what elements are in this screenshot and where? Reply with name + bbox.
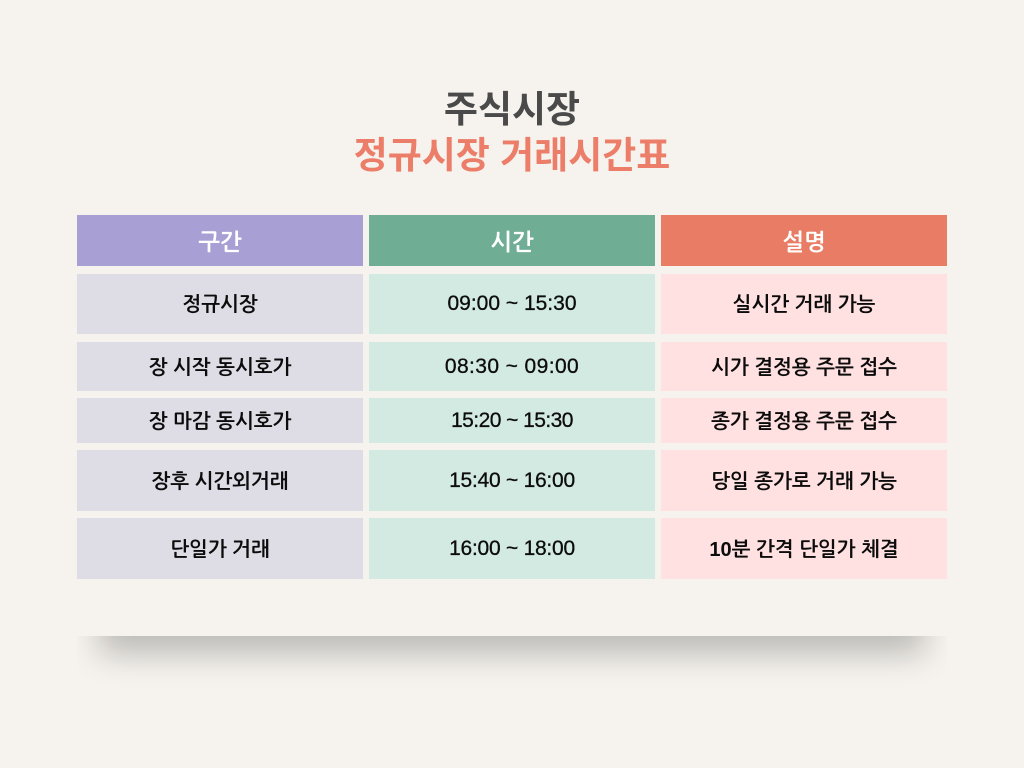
row 2 time: 08:30 ~ 09:00 [445,354,579,378]
row 1 time [369,274,655,334]
row 2 description [661,342,947,391]
row 2 time [369,342,655,391]
row 4 time [369,450,655,511]
row 3 description: 종가 결정용 주문 접수 [711,411,897,433]
header: 구간: 구간 [198,229,242,255]
row 5 description: 10분 간격 단일가 체결 [709,539,899,561]
row 4 description [661,450,947,511]
title: 주식시장: 주식시장 [444,89,580,130]
row 4 time: 15:40 ~ 16:00 [449,468,575,492]
title: 정규시장 거래시간표: 정규시장 거래시간표 [354,135,670,176]
header: 설명 [661,215,947,266]
row 3 description [661,398,947,443]
row 1 section: 정규시장 [182,294,258,316]
row 5 time: 16:00 ~ 18:00 [449,536,575,560]
row 3 section [77,398,363,443]
row 5 description [661,518,947,579]
row 2 description: 시가 결정용 주문 접수 [711,357,897,379]
row 1 section [77,274,363,334]
row 3 section: 장 마감 동시호가 [149,411,291,433]
row 2 section: 장 시작 동시호가 [149,357,291,379]
table drop shadow [84,636,940,670]
header: 시간: 시간 [490,229,534,255]
row 1 description [661,274,947,334]
row 1 description: 실시간 거래 가능 [733,294,875,316]
row 5 section: 단일가 거래 [170,539,270,561]
header: 구간 [77,215,363,266]
row 5 time [369,518,655,579]
row 5 section [77,518,363,579]
row 4 section: 장후 시간외거래 [151,471,289,493]
row 4 section [77,450,363,511]
row 3 time [369,398,655,443]
row 4 description: 당일 종가로 거래 가능 [711,471,897,493]
header: 설명: 설명 [782,229,826,255]
row 3 time: 15:20 ~ 15:30 [451,408,573,432]
row 1 time: 09:00 ~ 15:30 [447,292,577,314]
row 2 section [77,342,363,391]
header: 시간 [369,215,655,266]
